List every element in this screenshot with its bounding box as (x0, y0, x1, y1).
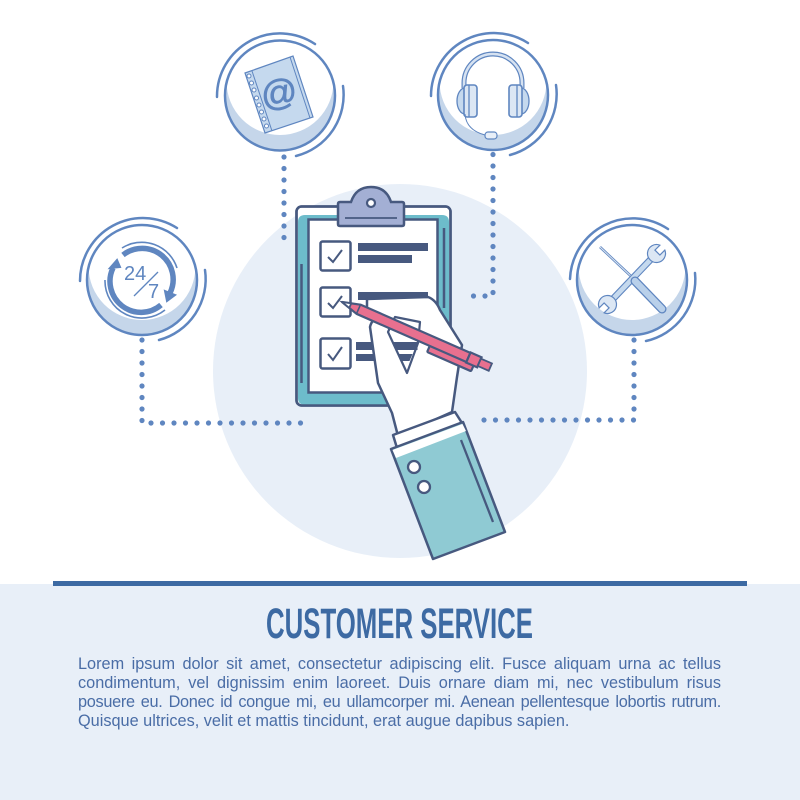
body text: Quisque ultrices, velit et mattis tincidunt, erat augue dapibus sapien. (78, 712, 569, 730)
body text: posuere eu. Donec id congue mi, eu ullamcorper mi. Aenean pellentesque lobortis rutrum. (78, 693, 721, 711)
shirt cuff (393, 412, 462, 448)
body text: Lorem ipsum dolor sit amet, consectetur adipiscing elit. Fusce aliquam urna ac tellus (78, 654, 721, 672)
gap between thumb and finger (388, 317, 420, 373)
button 1 (408, 461, 420, 473)
footer panel background (0, 584, 800, 800)
clipboard (266, 187, 533, 648)
icon: wrench and screwdriver (570, 205, 695, 341)
pen (337, 297, 493, 378)
body text (78, 654, 721, 730)
paper sheet (308, 220, 438, 392)
icon: 24/7 clock: 7 (148, 281, 159, 303)
icon: headset (431, 20, 557, 155)
sleeve (391, 422, 505, 559)
title: CUSTOMER SERVICE (266, 600, 533, 648)
icon: 24/7 clock (80, 205, 206, 340)
icon: address book (217, 20, 344, 156)
button 2 (418, 481, 430, 493)
icon: address book: @ (258, 70, 300, 115)
dotted connectors (142, 154, 634, 423)
clipboard edge marks (302, 228, 444, 383)
icon: 24/7 clock: 24 (124, 263, 146, 285)
hand (367, 297, 462, 436)
clip (338, 187, 404, 226)
body text: condimentum, vel dignissim enim laoreet. Duis ornare diam mi, nec vestibulum risus (78, 674, 721, 692)
background circle (213, 184, 587, 558)
footer top rule (53, 581, 747, 586)
checklist (320, 242, 428, 368)
